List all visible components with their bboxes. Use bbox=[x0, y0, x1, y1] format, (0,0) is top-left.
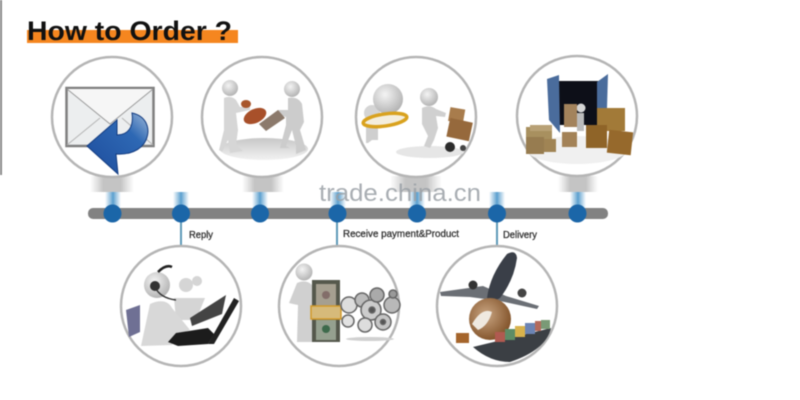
tape ring bbox=[362, 111, 408, 129]
figure small bbox=[362, 84, 408, 143]
globe bbox=[469, 298, 511, 340]
panel: two figures exchanging stamp bbox=[202, 57, 322, 177]
ship bbox=[473, 320, 551, 362]
crates bbox=[456, 333, 469, 343]
title: How to Order ? bbox=[27, 16, 232, 46]
left edge line bbox=[0, 0, 2, 175]
box stack right bbox=[586, 108, 633, 155]
blue stems bbox=[105, 192, 586, 208]
small folder bbox=[126, 305, 140, 337]
step labels bbox=[189, 229, 537, 241]
step labels: Reply bbox=[189, 230, 213, 241]
panel: plane, globe and ship bbox=[437, 246, 557, 366]
icon: blue return arrow bbox=[87, 113, 148, 174]
stamp bbox=[241, 100, 285, 131]
connectors bbox=[180, 222, 498, 247]
figure right bbox=[276, 81, 306, 154]
timeline dots bbox=[104, 204, 586, 222]
figure bbox=[289, 264, 313, 342]
watermark: trade.china.cn bbox=[319, 180, 481, 207]
main operator bbox=[141, 266, 190, 346]
figure with hand truck bbox=[420, 88, 473, 152]
worker and boxes bbox=[562, 104, 586, 147]
panel: email reply bbox=[52, 57, 172, 177]
figure left bbox=[219, 80, 250, 153]
timeline bbox=[88, 176, 608, 247]
icon: envelope bbox=[66, 88, 154, 146]
shipping container bbox=[547, 74, 608, 133]
money stack bbox=[311, 280, 341, 342]
laptop bbox=[168, 298, 239, 346]
panel: figures with tape and hand truck bbox=[356, 57, 476, 177]
box stack left bbox=[526, 125, 556, 154]
floor shadow bbox=[220, 138, 308, 160]
step labels: Delivery bbox=[503, 230, 537, 241]
background operators bbox=[174, 276, 226, 326]
plane bbox=[440, 252, 539, 309]
blurred label placeholders bbox=[90, 176, 598, 192]
panel: call centre bbox=[121, 246, 241, 366]
panel: container and boxes bbox=[517, 56, 637, 176]
gears bbox=[341, 288, 400, 332]
step labels: Receive payment&Product bbox=[343, 229, 459, 240]
panel: money and gears bbox=[279, 246, 400, 366]
